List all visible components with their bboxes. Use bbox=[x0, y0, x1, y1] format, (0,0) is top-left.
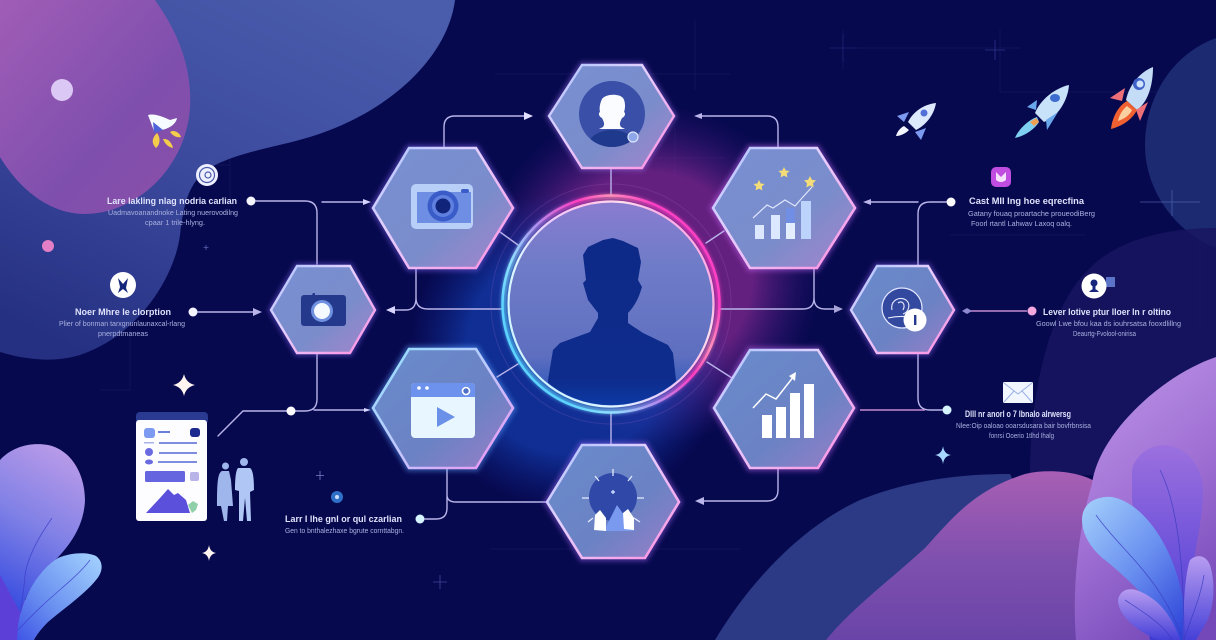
text block: bottom left: Larr I lhe gnl or qul czarlian bbox=[285, 514, 402, 525]
text block: right two bbox=[1036, 307, 1181, 338]
text block: left two: pnerpdtmaneas bbox=[98, 331, 149, 338]
leaf: violet bbox=[0, 540, 25, 640]
plant: bottom right bbox=[1082, 445, 1213, 640]
icon: at sign with badge bbox=[882, 288, 926, 332]
icon: coin bbox=[331, 491, 343, 503]
hex node: small camera bbox=[271, 266, 375, 353]
icon: person circle bbox=[1082, 274, 1115, 298]
icon: blue rocket bbox=[1015, 85, 1069, 138]
blob: bottom blue wave bbox=[715, 474, 1090, 640]
blob: bottom pink hill bbox=[826, 471, 1216, 640]
disc bbox=[509, 202, 713, 406]
icon: cross circle bbox=[110, 272, 136, 298]
text block: right two: Lever lotive ptur lloer ln r oltino bbox=[1043, 307, 1171, 318]
text block: right three: Nlee:Oip oaloao ooarsdusara bair bovfrbnsisa bbox=[956, 423, 1091, 430]
text block: right one: Cast MIl Ing hoe eqrecfina bbox=[969, 196, 1085, 207]
text block: bottom left: Gen to bnthalezhaxe bgrute cornttabgn. bbox=[285, 528, 404, 535]
document card bbox=[136, 412, 208, 521]
icon: red rocket bbox=[1110, 67, 1153, 129]
plant: bottom left bbox=[0, 444, 102, 640]
text block: right three bbox=[956, 409, 1091, 440]
leaf: small right bbox=[1183, 556, 1213, 640]
ring glow bbox=[504, 197, 718, 411]
icon: camera bbox=[301, 293, 346, 326]
leaf: violet bbox=[1132, 445, 1203, 640]
text block: left two: Noer Mhre le clorption bbox=[75, 307, 171, 318]
hex node: video bbox=[373, 349, 513, 468]
text block: left one: Uadmavoanandnoke Lating nuerovodilng bbox=[108, 210, 238, 217]
text block: right two: Goowl Lwe bfou kaa ds iouhrsatsa fooxdlillng bbox=[1036, 321, 1181, 328]
center glow bbox=[410, 105, 820, 510]
text block: right three: fonrsi Ooerio 1tlhd Ihalg bbox=[989, 433, 1054, 440]
hex node: bulb bbox=[547, 445, 679, 558]
leaf: blue bbox=[1082, 497, 1185, 640]
hex node: growth chart bbox=[714, 350, 854, 468]
icon: person bbox=[579, 81, 645, 147]
people silhouettes bbox=[217, 458, 254, 521]
icon: stars and bar chart bbox=[753, 167, 816, 239]
leaf: small left bbox=[1118, 589, 1180, 640]
icon: at sign circle bbox=[196, 164, 218, 186]
icon: video player bbox=[411, 383, 475, 438]
leaf: light blue bbox=[17, 553, 102, 640]
text block: bottom left bbox=[285, 514, 404, 535]
icon: idea with hands bbox=[582, 469, 644, 531]
text block: left one: Lare lakling nlag nodria carlian bbox=[107, 196, 237, 207]
blob: bottom-right lilac bbox=[1075, 357, 1216, 640]
blob: top-left purple circle bbox=[0, 0, 190, 214]
hex node: star chart bbox=[713, 148, 855, 268]
text block: left two: Plier of bonman tarxgnunlaunaxcal-rlang bbox=[59, 321, 185, 328]
decorative dots bbox=[42, 79, 73, 252]
leaf: large lilac bbox=[0, 444, 85, 612]
silhouette bbox=[546, 238, 676, 410]
icon: envelope bbox=[1003, 382, 1033, 403]
text block: right two: Deaurtg-Fvolool-onirisa bbox=[1073, 331, 1136, 338]
text block: right one: Foorl rtantl Lahwav Laxoq oalq. bbox=[971, 221, 1072, 228]
blob: top-left blue wave bbox=[0, 0, 455, 360]
text block: left one: cpaar 1 trile-hlyng. bbox=[145, 220, 205, 227]
hex node: profile bbox=[549, 65, 674, 168]
hex node: large camera bbox=[373, 148, 513, 268]
icon: winged rocket yellow bbox=[148, 114, 181, 148]
text block: right one: Gatany fouaq proartache proueodiBerg bbox=[968, 211, 1095, 218]
text block: right three: Dlll nr anorl o 7 lbnalo alrwersg bbox=[965, 409, 1071, 420]
text block: right one bbox=[968, 196, 1095, 228]
central profile node bbox=[491, 184, 731, 424]
text block: left one bbox=[107, 196, 238, 227]
connectors bbox=[198, 112, 1027, 519]
icon: growth bars bbox=[753, 372, 814, 438]
connector dots bbox=[188, 196, 1036, 524]
icon: small rocket bbox=[896, 103, 936, 140]
blob: right dark violet bbox=[1030, 228, 1216, 475]
blob: right blue circle bbox=[1145, 38, 1216, 248]
hex node: at sign bbox=[851, 266, 954, 353]
icon: camera bbox=[411, 184, 473, 229]
text block: left two bbox=[59, 307, 185, 338]
sparkle stars bbox=[173, 34, 1200, 589]
icon: purple app bbox=[991, 167, 1011, 187]
rings bbox=[502, 196, 720, 412]
